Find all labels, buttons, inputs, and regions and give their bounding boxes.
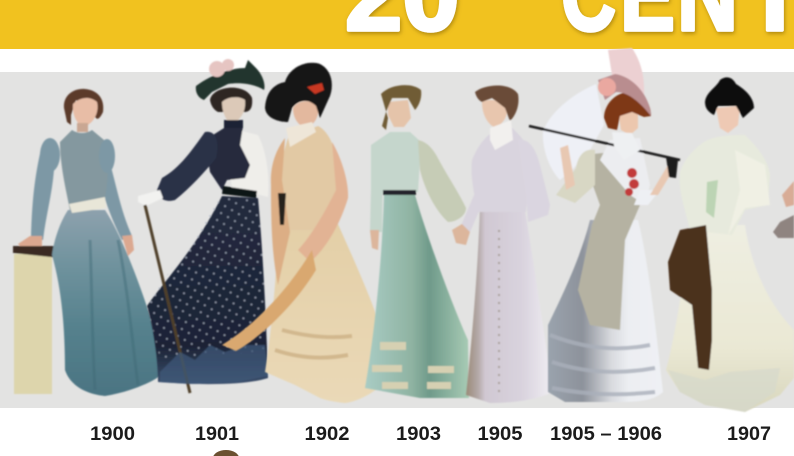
glove xyxy=(666,157,678,178)
head xyxy=(604,92,651,160)
puffed shoulders xyxy=(40,138,115,173)
skirt xyxy=(147,196,268,384)
year labels xyxy=(90,424,771,445)
arms xyxy=(31,145,132,240)
belt xyxy=(69,197,106,213)
figure: 1905–1906 white dress with parasol xyxy=(529,48,680,402)
skirt folds xyxy=(90,240,138,390)
year labels: 1902 xyxy=(304,424,350,445)
bodice xyxy=(680,135,770,235)
year labels: 1905 – 1906 xyxy=(550,424,662,445)
buttons xyxy=(498,230,500,395)
shawl xyxy=(271,138,290,285)
right sleeve xyxy=(518,140,550,222)
figure: 1903 sea-green dress xyxy=(365,85,469,398)
hat xyxy=(196,59,265,100)
belt xyxy=(222,186,257,198)
skirt xyxy=(365,195,469,398)
fan detail xyxy=(278,193,286,225)
sheer sleeve xyxy=(418,140,466,222)
head xyxy=(705,77,754,133)
figure: 1907 cream ruffled dress xyxy=(666,77,794,412)
ruffled sleeve xyxy=(728,150,770,235)
left sleeve xyxy=(460,195,484,232)
embroidered corset xyxy=(578,150,640,330)
pink feather hat xyxy=(598,48,651,116)
skirt hem shading xyxy=(668,368,780,412)
glove xyxy=(138,190,163,206)
hands xyxy=(18,235,134,256)
bodice xyxy=(371,132,421,192)
parasol canopy xyxy=(543,84,604,180)
year labels: 1901 xyxy=(195,424,239,445)
right sleeve and arm xyxy=(634,165,672,205)
silver teapot xyxy=(773,215,794,238)
figure: 1902 cream dress with peach shawl xyxy=(222,63,378,403)
head xyxy=(475,86,519,150)
head xyxy=(381,85,421,130)
skirt xyxy=(466,205,553,403)
next row figure hat top xyxy=(213,450,239,456)
year labels: 1903 xyxy=(396,424,441,445)
hand xyxy=(452,224,470,245)
cane xyxy=(145,205,190,393)
column pedestal xyxy=(13,246,66,394)
head xyxy=(64,89,103,132)
bodice xyxy=(60,130,108,210)
skirt dots xyxy=(147,196,266,358)
sleeve xyxy=(157,132,217,201)
title text xyxy=(345,0,794,53)
figure: 1905 lavender white dress xyxy=(452,86,553,403)
brown coat xyxy=(668,225,712,370)
belt xyxy=(383,190,416,195)
parasol stick xyxy=(529,126,680,160)
bodice xyxy=(471,126,530,212)
flowing ribbon xyxy=(222,250,316,351)
figure: 1900 blue-grey dress xyxy=(13,89,166,396)
skirt xyxy=(548,220,663,402)
lace ruffles xyxy=(275,330,352,358)
skirt xyxy=(52,210,166,396)
bodice xyxy=(277,126,338,230)
feathered black hat xyxy=(265,63,332,122)
shawl right xyxy=(298,142,348,262)
beige stripes xyxy=(372,342,454,389)
head xyxy=(286,101,318,147)
white blouse xyxy=(228,130,269,197)
title banner xyxy=(0,0,794,53)
head xyxy=(210,88,252,128)
adjacent figure hand xyxy=(782,181,794,207)
year labels: 1905 xyxy=(478,424,523,445)
left arm xyxy=(370,145,383,250)
year labels: 1900 xyxy=(90,424,135,445)
white bodice top xyxy=(600,138,650,205)
green sash xyxy=(706,180,718,218)
year labels: 1907 xyxy=(727,424,771,445)
bodice xyxy=(205,126,250,190)
left sleeve and arm xyxy=(556,145,595,203)
skirt xyxy=(265,195,378,403)
skirt xyxy=(666,225,794,412)
gallery background panel xyxy=(0,72,794,408)
flowers xyxy=(625,168,639,196)
ruffles xyxy=(550,335,655,394)
hem waves xyxy=(160,345,268,384)
figure: 1901 navy polka-dot dress xyxy=(138,59,269,393)
